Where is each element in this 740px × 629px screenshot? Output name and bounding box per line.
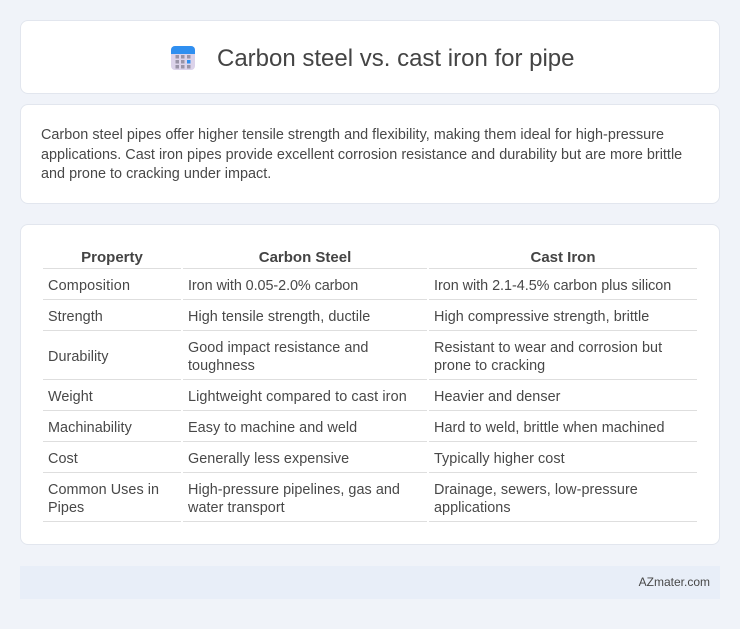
table: comparison: water transport bbox=[188, 500, 285, 516]
row: common uses bbox=[48, 482, 159, 516]
row: machinability: Machinability bbox=[48, 420, 132, 436]
table: comparison: prone to cracking bbox=[434, 358, 545, 374]
table: comparison: Drainage, sewers, low-pressure bbox=[434, 482, 638, 498]
summary text: Carbon steel pipes offer higher tensile strength and flexibility, making them ideal for high-pressure bbox=[41, 127, 664, 143]
table: comparison: Easy to machine and weld bbox=[188, 420, 357, 436]
row: common uses: Common Uses in bbox=[48, 482, 159, 498]
table: comparison: Iron with 2.1-4.5% carbon plus silicon bbox=[434, 278, 671, 294]
row: composition: Composition bbox=[48, 278, 130, 294]
footer credit: AZmater.com bbox=[639, 575, 710, 589]
panel: comparison table bbox=[20, 224, 720, 545]
summary text: applications. Cast iron pipes provide excellent corrosion resistance and durability but are more brittle bbox=[41, 146, 682, 162]
summary text bbox=[41, 127, 682, 182]
table: comparison: Hard to weld, brittle when machined bbox=[434, 420, 665, 436]
row: strength: Strength bbox=[48, 309, 103, 325]
header: cast iron: Cast Iron bbox=[530, 249, 596, 266]
row: common uses: Pipes bbox=[48, 500, 84, 516]
row: cost: Cost bbox=[48, 451, 78, 467]
table: comparison: High compressive strength, brittle bbox=[434, 309, 649, 325]
table: comparison: Iron with 0.05-2.0% carbon bbox=[188, 278, 358, 294]
icon: calendar bbox=[171, 46, 195, 70]
table: comparison: Resistant to wear and corrosion but bbox=[434, 340, 662, 356]
table: comparison: Heavier and denser bbox=[434, 389, 560, 405]
table: comparison: High-pressure pipelines, gas and bbox=[188, 482, 400, 498]
table: comparison: Typically higher cost bbox=[434, 451, 565, 467]
panel: summary bbox=[20, 104, 720, 204]
table: comparison: High tensile strength, ductile bbox=[188, 309, 370, 325]
table: comparison: applications bbox=[434, 500, 511, 516]
header: carbon steel: Carbon Steel bbox=[259, 249, 351, 266]
table: comparison: Generally less expensive bbox=[188, 451, 349, 467]
row: weight: Weight bbox=[48, 389, 93, 405]
summary text: and prone to cracking under impact. bbox=[41, 166, 271, 182]
table: comparison: Good impact resistance and bbox=[188, 340, 368, 356]
title text: Carbon steel vs. cast iron for pipe bbox=[217, 45, 575, 72]
header: property: Property bbox=[81, 249, 143, 266]
footer bbox=[20, 566, 720, 599]
table: comparison: toughness bbox=[188, 358, 255, 374]
panel: title bbox=[20, 20, 720, 94]
table: comparison: Lightweight compared to cast iron bbox=[188, 389, 407, 405]
row: durability: Durability bbox=[48, 349, 108, 365]
